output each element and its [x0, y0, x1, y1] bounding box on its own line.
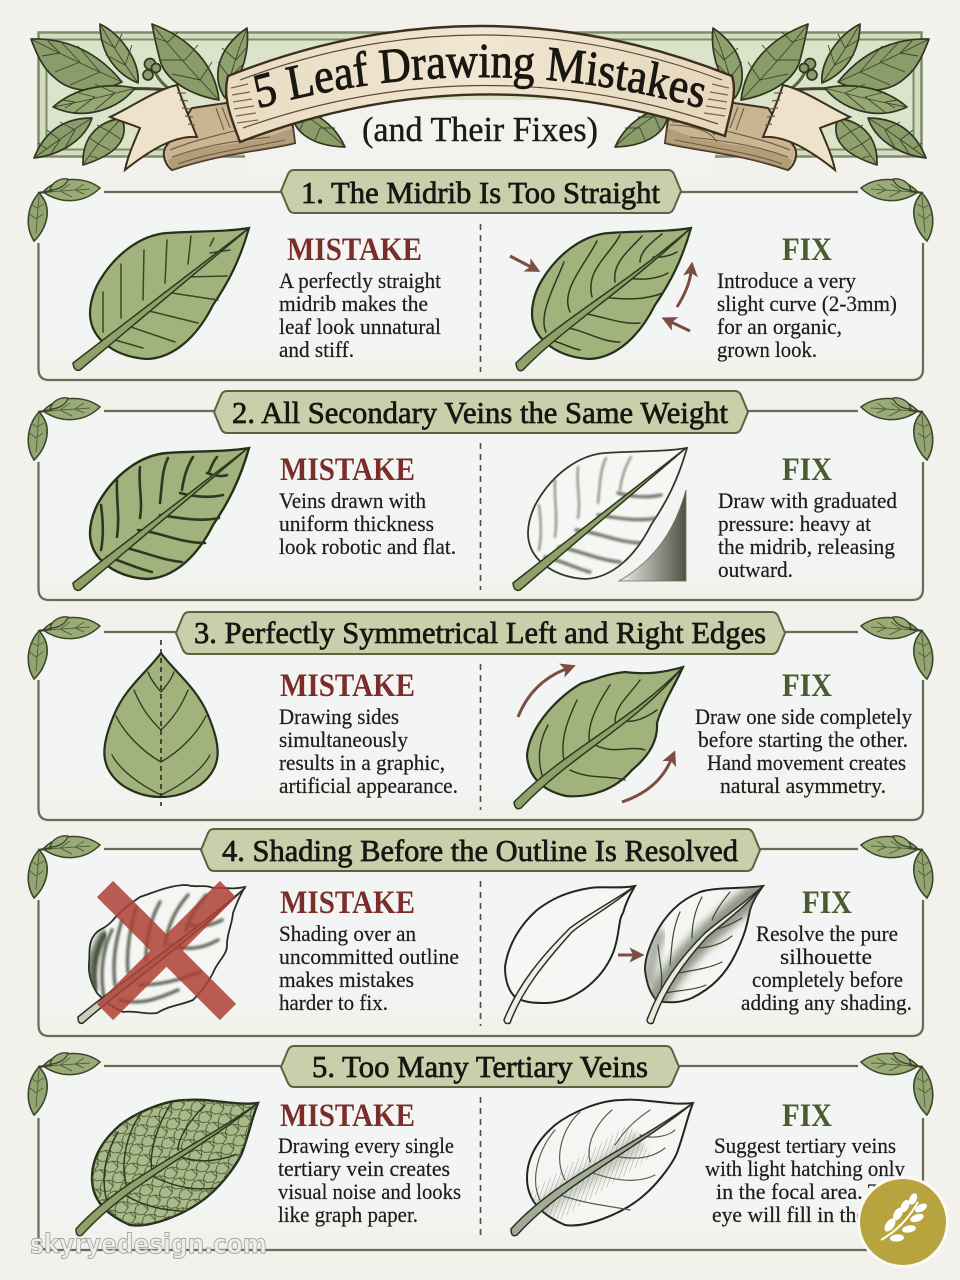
heading plaque: 3. Perfectly Symmetrical Left and Right Edges	[194, 615, 766, 650]
mistake text: uncommitted outline	[279, 944, 459, 969]
divider	[480, 224, 482, 372]
fix text: natural asymmetry.	[720, 773, 886, 798]
fix text	[705, 1098, 908, 1227]
left ribbon tail	[110, 85, 295, 170]
mistake text	[278, 1098, 461, 1227]
fix text: silhouette	[780, 944, 872, 969]
mistake text	[279, 232, 442, 362]
badge: wheat logo	[857, 1176, 949, 1268]
panel frame	[38, 632, 923, 820]
mistake text: look robotic and flat.	[279, 534, 456, 559]
fix text: in the focal area. The	[716, 1179, 902, 1204]
divider	[480, 443, 482, 590]
mistake text: leaf look unnatural	[279, 314, 441, 339]
illustration: shaded messy leaf	[78, 885, 245, 1023]
corner sprig right	[861, 179, 933, 241]
illustration: over-veined leaf	[76, 1095, 265, 1236]
illustration: asymmetrical leaf	[514, 667, 683, 809]
divider	[480, 881, 482, 1026]
fix text	[717, 232, 897, 362]
fix text: Draw one side completely	[695, 704, 913, 729]
illustration: suggested hatching leaf	[511, 1100, 693, 1236]
corner sprig left	[28, 398, 100, 460]
pressure wedge	[619, 490, 686, 581]
fix text: Suggest tertiary veins	[714, 1133, 896, 1158]
panel 3: symmetry	[28, 612, 933, 820]
corner sprig left	[28, 179, 100, 241]
mistake text: harder to fix.	[279, 990, 388, 1015]
heading plaque: 4. Shading Before the Outline Is Resolved	[222, 833, 738, 868]
mistake text: like graph paper.	[278, 1202, 418, 1227]
arrows	[518, 669, 671, 802]
fix text: outward.	[718, 557, 793, 582]
panel 5: tertiary veins	[28, 1046, 933, 1250]
mistake text: visual noise and looks	[278, 1179, 461, 1204]
mistake text	[279, 452, 456, 559]
fix text: Hand movement creates	[707, 750, 906, 775]
heading plaque: 1. The Midrib Is Too Straight	[301, 175, 660, 210]
corner sprig left	[28, 836, 100, 898]
panel 4: shading	[28, 829, 933, 1036]
illustration: clean outline to shaded leaf	[504, 886, 763, 1024]
fix text	[741, 885, 912, 1015]
illustration: curved midrib leaf with arrows	[510, 228, 691, 371]
corner sprig left	[28, 1053, 100, 1115]
panel frame	[38, 411, 923, 600]
heading plaque: 5. Too Many Tertiary Veins	[312, 1049, 648, 1084]
fix text	[695, 668, 913, 798]
fix text: eye will fill in the rest.	[712, 1202, 908, 1227]
arrows	[510, 256, 691, 331]
panel frame	[38, 1066, 923, 1250]
illustration: symmetrical leaf	[104, 640, 218, 806]
mistake text: uniform thickness	[279, 511, 434, 536]
fix text: Draw with graduated	[718, 488, 897, 513]
mistake text: MISTAKE	[280, 452, 415, 488]
mistake text: Drawing every single	[278, 1133, 454, 1158]
mistake text: Shading over an	[279, 921, 416, 946]
corner sprig right	[861, 398, 933, 460]
fix text: FIX	[782, 452, 832, 488]
panel 1: midrib	[28, 170, 933, 380]
divider	[480, 1097, 482, 1240]
fix text: FIX	[782, 1098, 832, 1134]
corner sprig left	[28, 617, 100, 679]
fix text: Introduce a very	[717, 268, 857, 293]
fix text: completely before	[752, 967, 903, 992]
illustration: graduated pressure leaf	[513, 448, 687, 590]
mistake text: A perfectly straight	[279, 268, 442, 293]
main ribbon	[225, 24, 736, 144]
subtitle: (and Their Fixes)	[362, 110, 598, 149]
fix text: FIX	[782, 668, 832, 704]
mistake text: MISTAKE	[280, 668, 415, 704]
mistake text: MISTAKE	[280, 885, 415, 921]
fix text: Resolve the pure	[756, 921, 898, 946]
fix text: FIX	[782, 232, 832, 268]
fix text: adding any shading.	[741, 990, 912, 1015]
panel frame	[38, 849, 923, 1036]
mistake text: Drawing sides	[279, 704, 399, 729]
watermark: skyryedesign.com	[30, 1229, 267, 1260]
mistake text: artificial appearance.	[279, 773, 458, 798]
fix text: grown look.	[717, 337, 817, 362]
outline leaf	[504, 886, 635, 1024]
fix text: for an organic,	[717, 314, 842, 339]
mistake text: MISTAKE	[280, 1098, 415, 1134]
corner sprig right	[861, 1053, 933, 1115]
green frame backdrop	[38, 32, 922, 175]
corner sprig right	[861, 836, 933, 898]
mistake text: and stiff.	[279, 337, 354, 362]
illustration: straight midrib leaf	[73, 228, 249, 370]
panel frame	[38, 192, 923, 380]
illustration: uniform veins leaf	[73, 448, 249, 590]
mistake text	[279, 885, 459, 1015]
fix text: the midrib, releasing	[718, 534, 895, 559]
mistake text: tertiary vein creates	[278, 1156, 450, 1181]
fix text	[718, 452, 897, 582]
right foliage	[615, 24, 929, 165]
header banner	[30, 23, 930, 172]
right ribbon tail	[665, 85, 850, 170]
fix text: before starting the other.	[698, 727, 908, 752]
fix text: with light hatching only	[705, 1156, 906, 1181]
mistake text: midrib makes the	[279, 291, 428, 316]
shaded leaf	[645, 886, 763, 1024]
mistake text: results in a graphic,	[279, 750, 445, 775]
fix text: pressure: heavy at	[718, 511, 872, 536]
title: 5 Leaf Drawing Mistakes	[254, 44, 705, 108]
mistake text: MISTAKE	[287, 232, 422, 268]
corner sprig right	[861, 617, 933, 679]
mistake text	[279, 668, 458, 798]
red cross	[105, 889, 228, 1012]
left foliage	[31, 24, 345, 165]
fix text: FIX	[802, 885, 852, 921]
mistake text: Veins drawn with	[279, 488, 426, 513]
panel 2: vein weight	[28, 391, 933, 600]
divider	[480, 664, 482, 810]
heading plaque: 2. All Secondary Veins the Same Weight	[232, 395, 728, 430]
mistake text: simultaneously	[279, 727, 409, 752]
mistake text: makes mistakes	[279, 967, 414, 992]
fix text: slight curve (2-3mm)	[717, 291, 897, 316]
step arrow	[618, 954, 634, 956]
